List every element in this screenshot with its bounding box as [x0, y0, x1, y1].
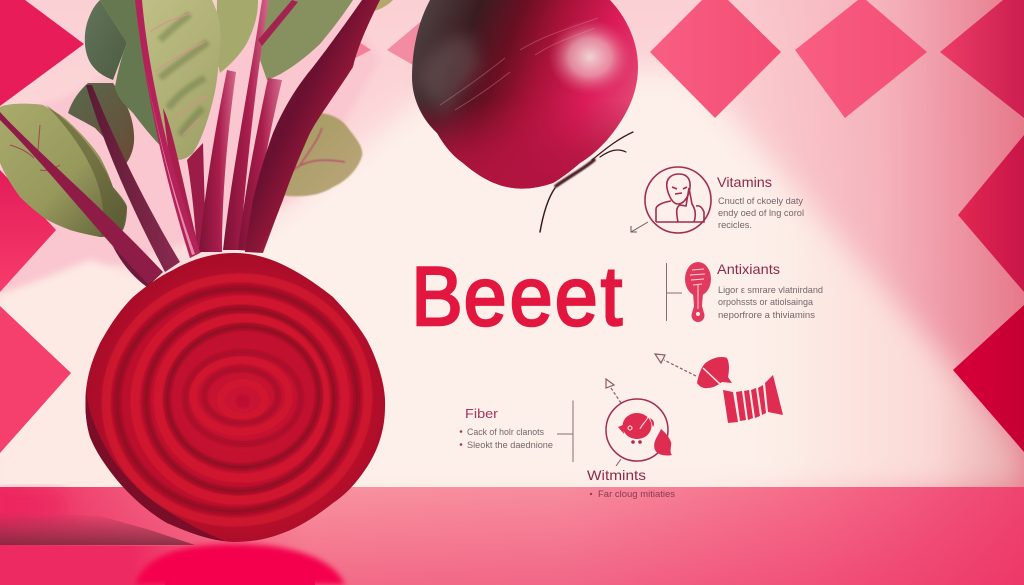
text: fiber: Sleokt the daednione: [467, 440, 553, 450]
floor: [0, 487, 1024, 585]
arrow: dashed to upper-left: [655, 354, 696, 376]
whole beet: [412, 0, 638, 189]
beet slice: [85, 253, 385, 542]
text: vitamins: [718, 196, 804, 231]
text: witmints: Far cloug mitiaties: [598, 489, 676, 499]
leaf: left: [0, 104, 163, 284]
background diamonds: [0, 0, 1024, 453]
text: vitamins: recicles.: [718, 220, 752, 231]
heading: antioxidants: Antixiants: [717, 261, 780, 277]
icon: vitamins: [631, 167, 711, 233]
text: antioxidants: orpohssts or atiolsainga: [718, 297, 814, 308]
connector: antioxidants: [666, 263, 682, 321]
text: antioxidants: Ligor ε smrare vlatnirdand: [718, 285, 823, 296]
icon: fibre scroll: [697, 357, 783, 423]
icon: witmints: [606, 379, 672, 466]
text: antioxidants: [718, 285, 823, 321]
title: Beeet: [411, 250, 622, 344]
connector: fiber: [557, 400, 573, 462]
leaf: large centre: [100, 0, 221, 258]
text: vitamins: Cnuctl of ckoely daty: [718, 196, 803, 207]
icon: antioxidants: [685, 262, 711, 322]
beet root tail: [540, 132, 633, 232]
text: fiber: [460, 427, 553, 450]
heading: witmints: Witmints: [587, 467, 646, 483]
back beet stalks: [86, 0, 380, 287]
heading: fiber: Fiber: [465, 406, 499, 421]
text: vitamins: endy oed of lng corol: [718, 208, 804, 219]
text: fiber: Cack of holr clanots: [467, 427, 544, 437]
text: antioxidants: neporfrore a thiviamins: [718, 310, 815, 321]
heading: vitamins: Vitamins: [717, 174, 772, 190]
back leaves: [68, 0, 393, 196]
